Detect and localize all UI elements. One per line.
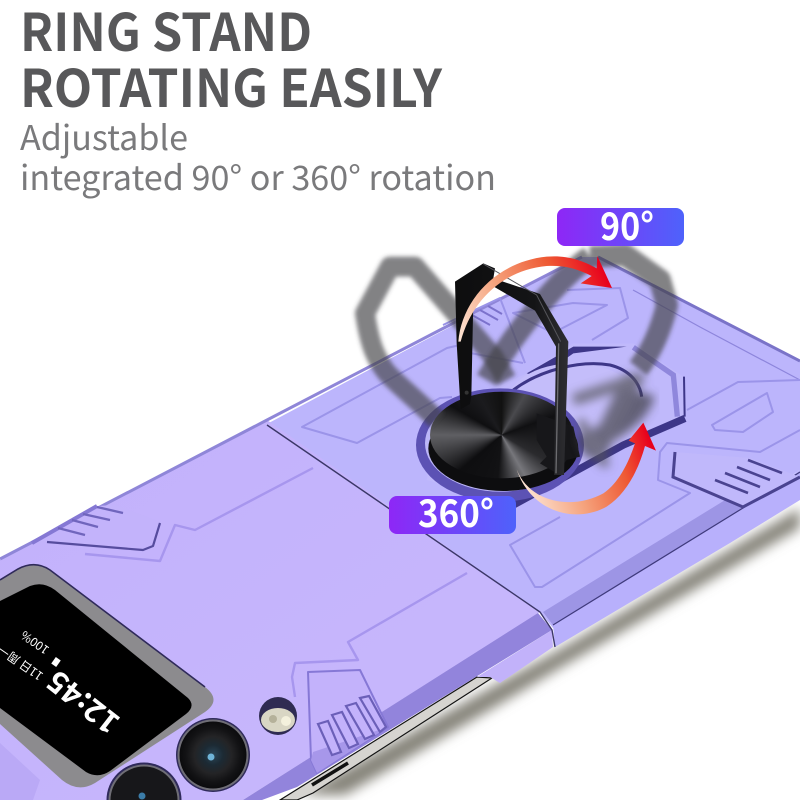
case upper half lower light band: [553, 470, 800, 647]
badge: 90 degrees: 90°: [600, 196, 654, 251]
case upper half surface: [265, 257, 800, 628]
title: ROTATING EASILY: [20, 47, 443, 122]
upper half ridge lines: [302, 288, 800, 587]
upper clip near ring: [472, 306, 502, 325]
raised hexagonal plate: [427, 343, 685, 505]
case outer edge lines: [0, 257, 582, 559]
right ghost ring: [487, 255, 667, 380]
clock time: 12:45: [36, 661, 128, 747]
oval recess top arc: [513, 364, 642, 397]
battery icon: [51, 657, 61, 667]
case lower half light band: [477, 630, 553, 683]
oval recess: [505, 363, 642, 450]
subtitle text: [20, 111, 496, 200]
top-left clip: [32, 505, 160, 550]
silver side button: [312, 763, 348, 785]
silver phone side edge: [280, 677, 492, 800]
left ghost ring: [365, 267, 507, 420]
subtitle text: integrated 90° or 360° rotation: [20, 151, 496, 200]
bottom rotation arrow: [517, 423, 656, 514]
black screen: [0, 584, 192, 775]
hinge line: [267, 425, 555, 647]
lower half ridge lines: [85, 468, 467, 697]
camera window: [0, 565, 214, 787]
black ring stand arch: [455, 263, 568, 475]
badge: 90 degrees: [557, 196, 684, 251]
battery text: 100%: [17, 627, 52, 659]
subtitle text: Adjustable: [20, 111, 188, 160]
title: [20, 0, 443, 122]
hub body: [428, 406, 578, 491]
top rotation arrow: [458, 256, 612, 342]
cast shadow under phone: [300, 508, 800, 795]
hub notch: [537, 413, 580, 473]
case lower half surface: [0, 420, 540, 800]
case lower half dark band: [243, 613, 552, 800]
folded ring ghost: [573, 377, 645, 467]
case upper half dark band: [543, 497, 743, 625]
band dark line: [553, 472, 800, 625]
phone with purple case: [0, 257, 800, 800]
upper-right clip: [673, 452, 800, 507]
ring mount zoomed group: [365, 255, 685, 514]
badge: 360 degrees: [389, 483, 516, 538]
camera lenses: [106, 718, 250, 800]
hub socket: [416, 388, 584, 502]
badge: 360 degrees: 360°: [418, 483, 494, 538]
camera flash: [259, 697, 297, 735]
lower-left corner piece: [0, 743, 40, 800]
bottom clip with slots: [308, 670, 388, 773]
brushed metal disc: [430, 392, 573, 478]
